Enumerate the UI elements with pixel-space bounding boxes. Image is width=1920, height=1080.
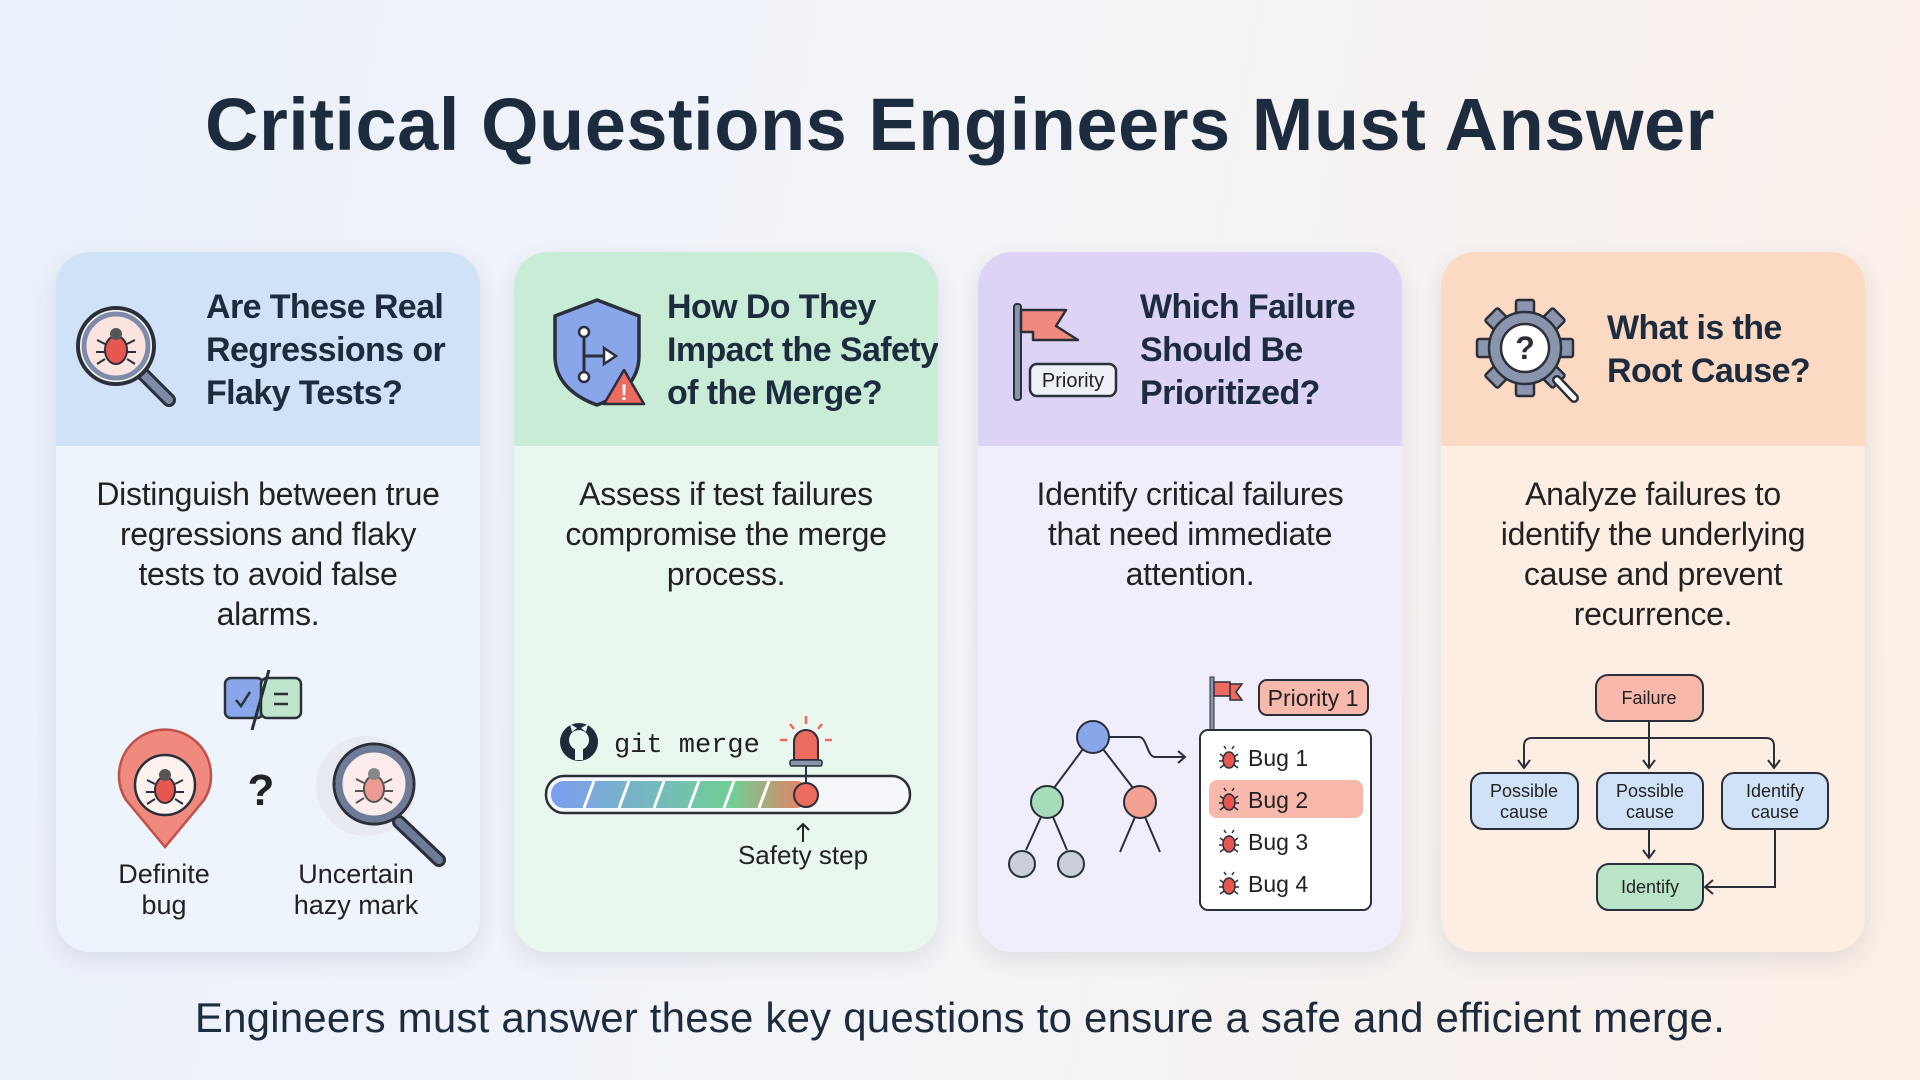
header title 3: Should Be xyxy=(1140,331,1303,369)
header: card 3 xyxy=(978,252,1402,446)
header title 1 xyxy=(206,288,446,412)
header title 1: Regressions or xyxy=(206,331,445,369)
body text 4: identify the underlying xyxy=(1501,516,1805,552)
body text 3: attention. xyxy=(1126,556,1254,592)
box: failure: Failure xyxy=(1621,688,1677,708)
box: possible cause 1: cause xyxy=(1500,802,1548,822)
header title 2: How Do They xyxy=(667,288,876,326)
header: card 4 xyxy=(1441,252,1865,446)
header title 2 xyxy=(667,288,938,412)
box: possible cause 2 xyxy=(1597,773,1703,829)
box: possible cause 2: cause xyxy=(1626,802,1674,822)
body text 1: tests to avoid false xyxy=(138,556,398,592)
icon: check not equal xyxy=(225,670,301,730)
box: possible cause 2: Possible xyxy=(1616,781,1684,801)
box: identify cause: Identify xyxy=(1746,781,1804,801)
header title 1: Flaky Tests? xyxy=(206,374,402,412)
bug list: Bug 1 xyxy=(1248,745,1308,771)
header title 4: Root Cause? xyxy=(1607,352,1810,390)
body text 2: compromise the merge xyxy=(565,516,887,552)
body text 2 xyxy=(565,476,887,592)
header title 3 xyxy=(1140,288,1355,412)
illustration: merge progress bar xyxy=(544,716,912,870)
bug list xyxy=(1200,730,1371,910)
body text 4: recurrence. xyxy=(1574,596,1732,632)
bug list: Bug 4 xyxy=(1248,871,1308,897)
flag and priority 1 label xyxy=(1210,677,1368,732)
icon: priority flag: Priority xyxy=(1042,370,1104,392)
panel: merge safety xyxy=(514,252,938,952)
icon: gear with question and magnifier: ? xyxy=(1515,330,1535,366)
box: identify xyxy=(1597,864,1703,910)
footer text: Engineers must answer these key questions to ensure a safe and efficient merge. xyxy=(195,994,1725,1041)
icon: priority flag xyxy=(1013,303,1118,401)
header: card 1 xyxy=(56,252,480,446)
box: failure xyxy=(1596,675,1703,721)
label: uncertain hazy mark: hazy mark xyxy=(294,890,419,920)
body text 3 xyxy=(1036,476,1343,592)
body text 1: alarms. xyxy=(217,596,319,632)
label: git merge: git merge xyxy=(614,731,760,761)
label: definite bug: bug xyxy=(141,890,187,920)
box: possible cause 1: Possible xyxy=(1490,781,1558,801)
question mark: ? xyxy=(248,766,274,815)
body text 4: cause and prevent xyxy=(1524,556,1782,592)
header title 4: What is the xyxy=(1607,309,1782,347)
icon: alarm xyxy=(780,716,832,766)
icon: shield with branch and warning: ! xyxy=(620,380,628,405)
connectors xyxy=(1518,721,1780,894)
header title 2: Impact the Safety xyxy=(667,331,938,369)
illustration: tree to bug list xyxy=(1008,676,1372,911)
body text 1: regressions and flaky xyxy=(120,516,416,552)
body text 2: Assess if test failures xyxy=(579,476,873,512)
box: possible cause 1 xyxy=(1471,773,1578,829)
label: uncertain hazy mark: Uncertain xyxy=(298,859,414,889)
flag and priority 1 label: Priority 1 xyxy=(1268,685,1358,711)
body text 3: Identify critical failures xyxy=(1036,476,1343,512)
panel: real regressions or flaky xyxy=(56,252,480,952)
body text 2: process. xyxy=(667,556,785,592)
body text 4 xyxy=(1501,476,1805,632)
bug list: Bug 3 xyxy=(1248,829,1308,855)
header title 1: Are These Real xyxy=(206,288,443,326)
icon: shield with branch and warning xyxy=(553,298,646,407)
icon: gear with question and magnifier xyxy=(1476,298,1579,403)
label: definite bug: Definite xyxy=(118,859,210,889)
header title 3: Which Failure xyxy=(1140,288,1355,326)
icon: magnifier with bug xyxy=(76,306,176,407)
illustration: cause flowchart xyxy=(1470,674,1829,911)
icon: github xyxy=(560,723,598,761)
label: safety step xyxy=(738,824,868,870)
progress bar xyxy=(546,766,910,813)
body text 3: that need immediate xyxy=(1048,516,1332,552)
panel: root cause xyxy=(1441,252,1865,952)
bug list: Bug 2 xyxy=(1248,787,1308,813)
header title 4 xyxy=(1607,309,1810,390)
box: identify cause: cause xyxy=(1751,802,1799,822)
header title 2: of the Merge? xyxy=(667,374,882,412)
header title 3: Prioritized? xyxy=(1140,374,1320,412)
tree diagram xyxy=(1009,721,1185,877)
icon: location pin bug xyxy=(119,730,211,847)
box: identify cause xyxy=(1722,773,1828,829)
label: safety step: Safety step xyxy=(738,840,868,870)
panel: prioritize failure xyxy=(978,252,1402,952)
illustration: definite vs uncertain xyxy=(118,670,446,920)
body text 1 xyxy=(96,476,440,632)
icon: hazy magnifier xyxy=(316,736,439,860)
body text 1: Distinguish between true xyxy=(96,476,440,512)
box: identify: Identify xyxy=(1621,877,1679,897)
body text 4: Analyze failures to xyxy=(1525,476,1781,512)
title: Critical Questions Engineers Must Answer xyxy=(205,83,1715,166)
header: card 2 xyxy=(514,252,938,446)
